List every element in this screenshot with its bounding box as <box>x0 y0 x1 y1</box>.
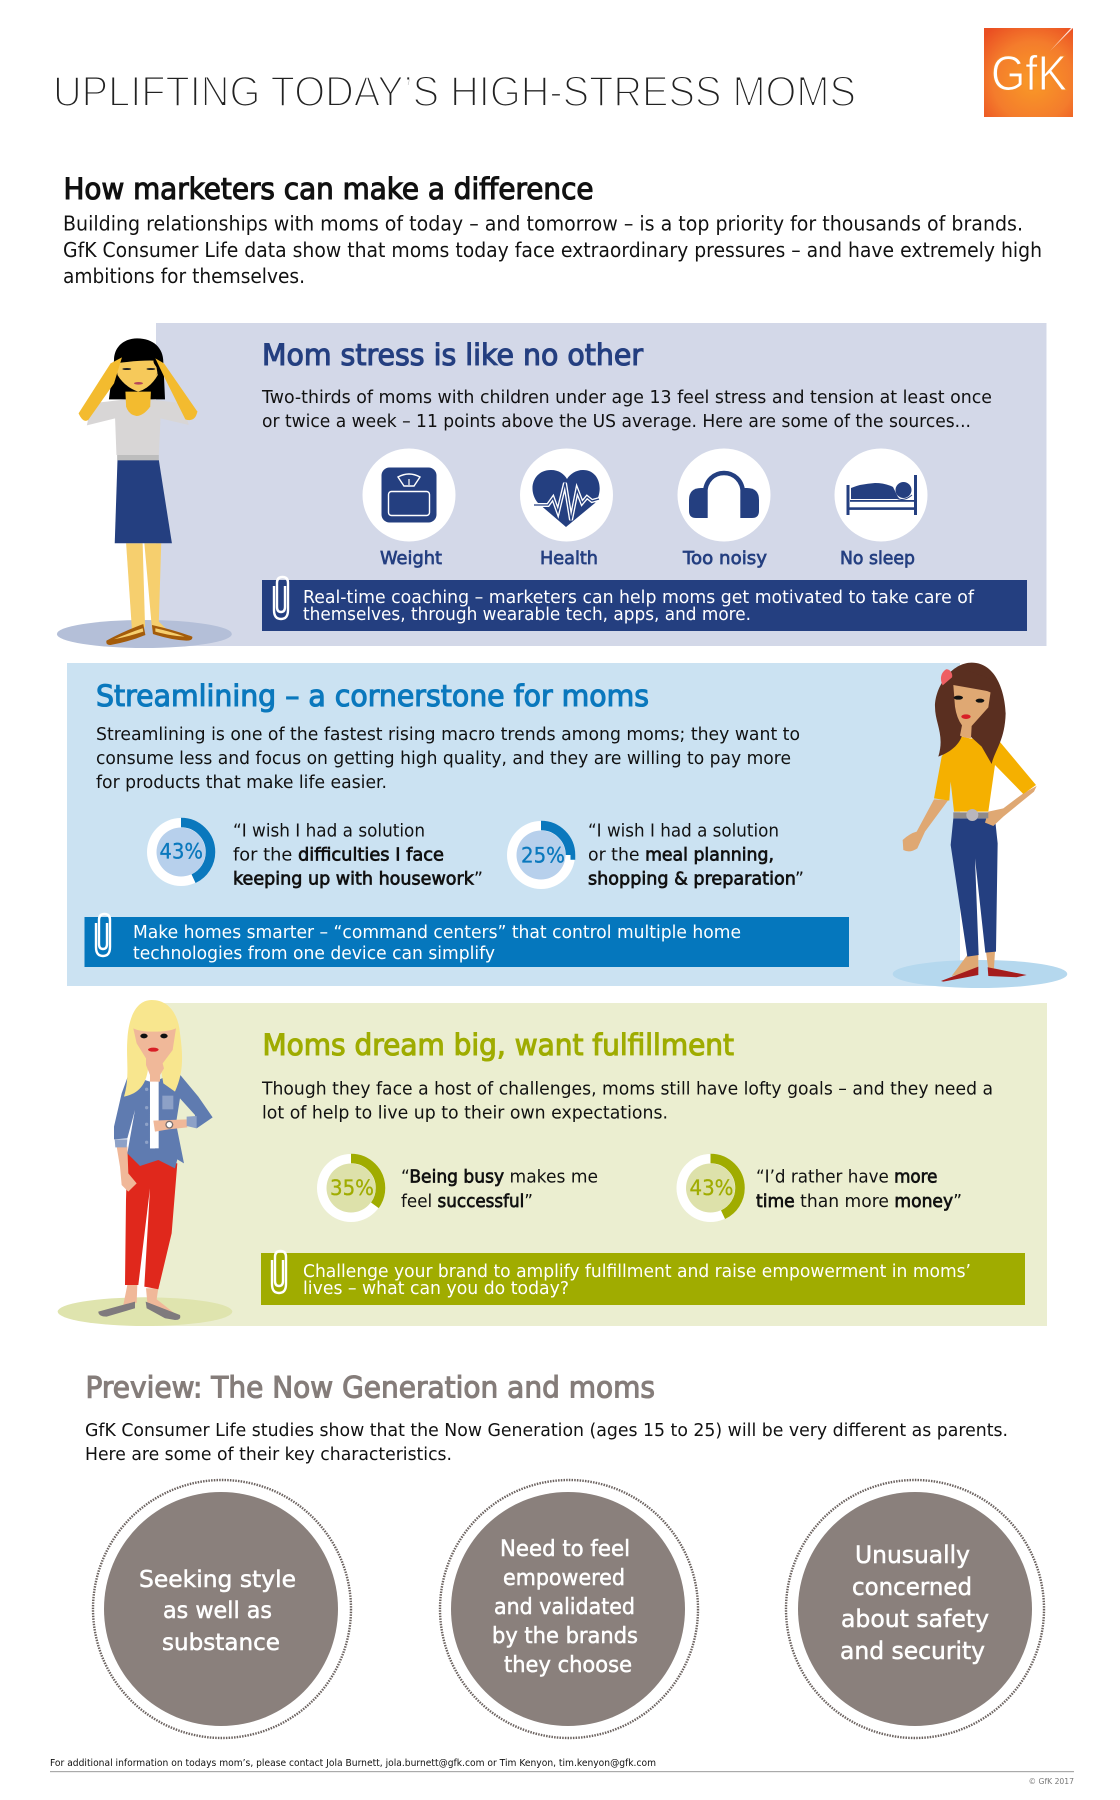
callout: smarter homes: Make homes smarter – “command centers” that control multiple home <box>133 922 741 943</box>
title: UPLIFTING TODAY’S HIGH-STRESS MOMS <box>53 68 856 116</box>
intro heading: How marketers can make a difference <box>64 172 594 206</box>
circle: style and substance: Seeking style <box>139 1567 296 1593</box>
footer: For additional information on todays mom’s, please contact Jola Burnett, jola.burnett@gfk.com or Tim Kenyon, tim.kenyon@gfk.com <box>50 1758 656 1769</box>
intro text: ambitions for themselves. <box>63 264 305 288</box>
logo: GfK: GfK <box>991 47 1067 101</box>
icon: heart with pulse <box>520 448 613 542</box>
body text: dream big: lot of help to live up to their own expectations. <box>262 1102 668 1124</box>
quote: meal planning: “I wish I had a solution <box>588 820 779 842</box>
callout: real-time coaching <box>262 577 1027 631</box>
circle: empowered and validated <box>440 1480 698 1738</box>
quote: more time: time than more money” <box>756 1191 962 1212</box>
donut: 25%: 25% <box>521 844 565 868</box>
body text: streamlining: consume less and focus on getting high quality, and they are willing to pay more <box>96 748 791 769</box>
donut: 35%: 35% <box>330 1176 374 1200</box>
quote: being busy <box>401 1166 598 1212</box>
quote: housework <box>233 820 483 890</box>
body text: streamlining <box>96 724 800 793</box>
logo: GfK <box>984 28 1073 117</box>
body text: streamlining: Streamlining is one of the fastest rising macro trends among moms; they want to <box>96 724 800 745</box>
donut: 43% <box>147 818 215 886</box>
intro text: Building relationships with moms of today – and tomorrow – is a top priority for thousands of brands. <box>63 212 1023 236</box>
donut: 35% <box>317 1154 385 1222</box>
circle: empowered and validated: Need to feel <box>500 1537 630 1562</box>
circle: safety and security: concerned <box>852 1573 972 1601</box>
body text: mom stress: Two-thirds of moms with children under age 13 feel stress and tension at least once <box>261 387 992 408</box>
labels: stress sources: Health <box>540 548 598 569</box>
labels: stress sources: Weight <box>380 548 442 569</box>
callout: challenge your brand: Challenge your brand to amplify fulfillment and raise empowerment in moms’ <box>303 1261 971 1282</box>
panel: streamlining <box>67 663 960 986</box>
circle: safety and security: and security <box>840 1637 985 1665</box>
quote: being busy: “Being busy makes me <box>401 1166 598 1188</box>
panel: dream big <box>156 1003 1047 1326</box>
donut: 43%: 43% <box>160 840 203 864</box>
quote: more time: “I’d rather have more <box>756 1166 938 1188</box>
quote: meal planning: or the meal planning, <box>588 844 774 866</box>
figure: mom with hand on hip <box>893 663 1067 988</box>
callout: challenge your brand <box>261 1251 1025 1305</box>
figure: blonde mom checking watch <box>58 1000 232 1326</box>
footer <box>50 1758 1074 1786</box>
circle: empowered and validated: and validated <box>494 1595 635 1620</box>
body text: preview: GfK Consumer Life studies show that the Now Generation (ages 15 to 25) will be very different as parents. <box>85 1420 1008 1441</box>
quote: more time <box>756 1166 962 1212</box>
body text: dream big: Though they face a host of challenges, moms still have lofty goals – and they need a <box>261 1078 993 1100</box>
circle: safety and security: Unusually <box>855 1541 970 1569</box>
heading: streamlining: Streamlining – a cornerstone for moms <box>96 679 649 713</box>
heading: mom stress: Mom stress is like no other <box>262 338 643 372</box>
circle: style and substance: substance <box>162 1630 280 1656</box>
circle: empowered and validated: empowered <box>503 1566 625 1591</box>
callout: real-time coaching: themselves, through wearable tech, apps, and more. <box>303 604 751 625</box>
icon: weight scale <box>362 448 456 542</box>
donut: 43% fulfilment: 43% <box>690 1176 734 1200</box>
intro text: GfK Consumer Life data show that moms today face extraordinary pressures – and have extremely high <box>63 238 1042 262</box>
heading: dream big: Moms dream big, want fulfillment <box>262 1028 734 1062</box>
body text: streamlining: for products that make life easier. <box>96 772 387 793</box>
body text: mom stress <box>261 387 992 432</box>
callout: challenge your brand: lives – what can you do today? <box>303 1278 569 1299</box>
labels: stress sources <box>380 548 915 569</box>
labels: stress sources: Too noisy <box>682 548 767 569</box>
callout: smarter homes <box>84 914 849 967</box>
donut: 25% <box>507 821 575 889</box>
circle: safety and security: about safety <box>841 1605 989 1633</box>
figure: stressed mom <box>57 338 232 648</box>
intro text <box>63 212 1042 288</box>
footer: © GfK 2017 <box>1028 1777 1074 1786</box>
circle: safety and security <box>786 1480 1044 1738</box>
circle: style and substance <box>93 1480 351 1738</box>
quote: housework: “I wish I had a solution <box>233 820 425 842</box>
circle: empowered and validated: by the brands <box>492 1624 638 1649</box>
panel: mom stress <box>156 323 1046 646</box>
quote: meal planning: shopping & preparation” <box>588 868 804 890</box>
labels: stress sources: No sleep <box>840 548 915 569</box>
circle: empowered and validated: they choose <box>504 1653 632 1678</box>
icon: bed <box>834 448 928 542</box>
body text: preview <box>85 1420 1008 1465</box>
quote: being busy: feel successful” <box>401 1191 533 1212</box>
quote: meal planning <box>588 820 804 890</box>
callout: real-time coaching: Real-time coaching – marketers can help moms get motivated to take care of <box>303 587 975 608</box>
quote: housework: for the difficulties I face <box>233 844 444 866</box>
body text: mom stress: or twice a week – 11 points above the US average. Here are some of the sources... <box>262 411 971 432</box>
body text: preview: Here are some of their key characteristics. <box>85 1444 452 1465</box>
icon: headphones <box>678 448 770 542</box>
donut: 43% fulfilment <box>676 1154 744 1222</box>
quote: housework: keeping up with housework” <box>233 868 483 890</box>
circle: style and substance: as well as <box>163 1598 272 1624</box>
heading: preview: Preview: The Now Generation and moms <box>86 1370 655 1404</box>
body text: dream big <box>261 1078 993 1124</box>
callout: smarter homes: technologies from one device can simplify <box>133 943 495 964</box>
